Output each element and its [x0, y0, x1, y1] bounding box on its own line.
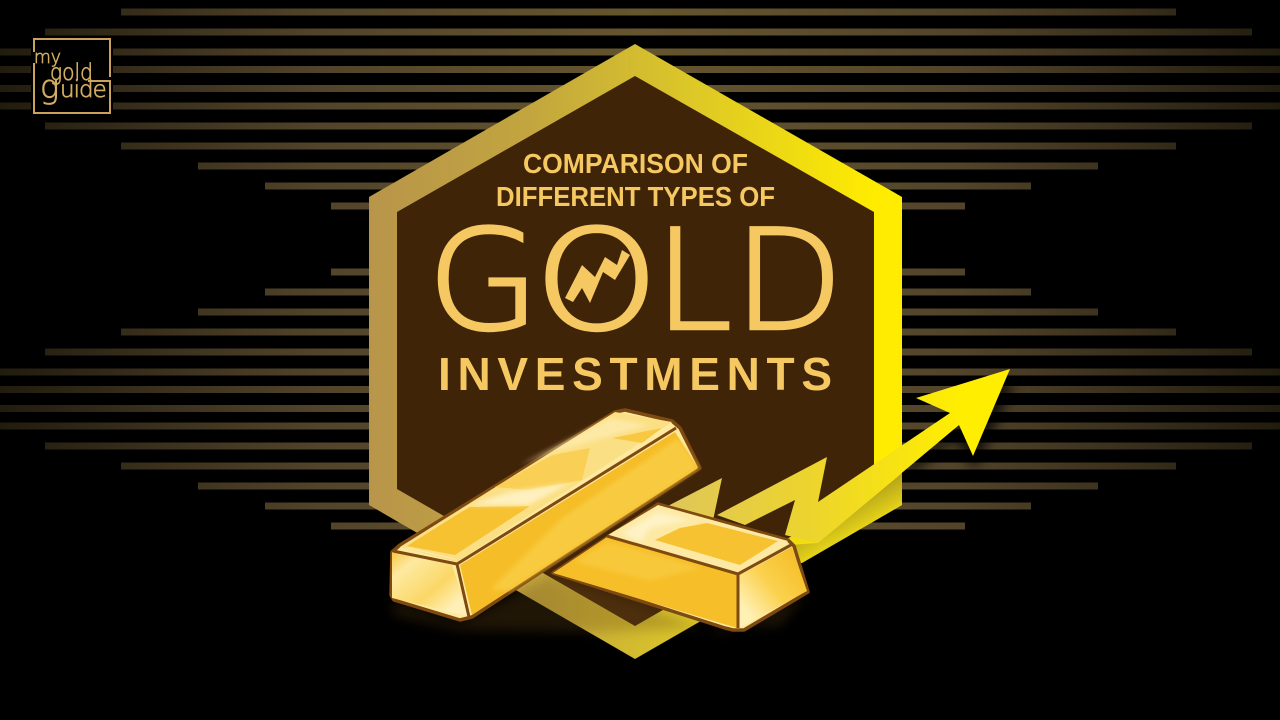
gold bars	[391, 410, 808, 634]
title: GOLD: G	[428, 200, 540, 362]
title: GOLD: O	[534, 200, 658, 362]
arrow shade on hexagon	[790, 473, 902, 563]
hexagon gradient ring	[369, 44, 902, 659]
back bar ridge lines	[607, 536, 791, 628]
arrow shadow	[905, 380, 1014, 480]
hexagon inner panel	[391, 70, 880, 632]
title: comparison of different types of	[496, 148, 775, 212]
front bar top face	[400, 412, 672, 562]
front bar long face	[460, 432, 698, 615]
front gold bar	[391, 410, 700, 620]
title: GOLD: D	[734, 200, 843, 362]
front bar silhouette	[391, 410, 700, 620]
gold bars glow	[391, 575, 808, 634]
icon: zigzag growth line inside O	[565, 250, 630, 303]
logo: my gold guide: g	[40, 68, 59, 106]
front bar end face	[392, 552, 468, 616]
background horizontal stripes	[0, 8, 1280, 530]
rising zigzag arrow	[660, 369, 1010, 545]
logo: my gold guide	[31, 36, 113, 115]
hexagon badge	[369, 44, 902, 659]
title: comparison of different types of: DIFFERENT TYPES OF	[496, 181, 775, 212]
title: investments: INVESTMENTS	[438, 348, 832, 400]
logo: my gold guide: my	[34, 47, 61, 68]
back bar top face	[608, 505, 788, 572]
back bar end face	[739, 547, 807, 628]
logo: my gold guide: uide	[60, 77, 106, 103]
title: comparison of different types of: COMPARISON OF	[523, 148, 748, 179]
front bar ridge lines	[393, 428, 676, 617]
back bar silhouette	[553, 504, 808, 630]
back bar front face	[553, 537, 737, 628]
back gold bar	[553, 504, 808, 630]
title: GOLD: L	[655, 200, 732, 362]
logo: my gold guide: gold	[50, 60, 93, 86]
